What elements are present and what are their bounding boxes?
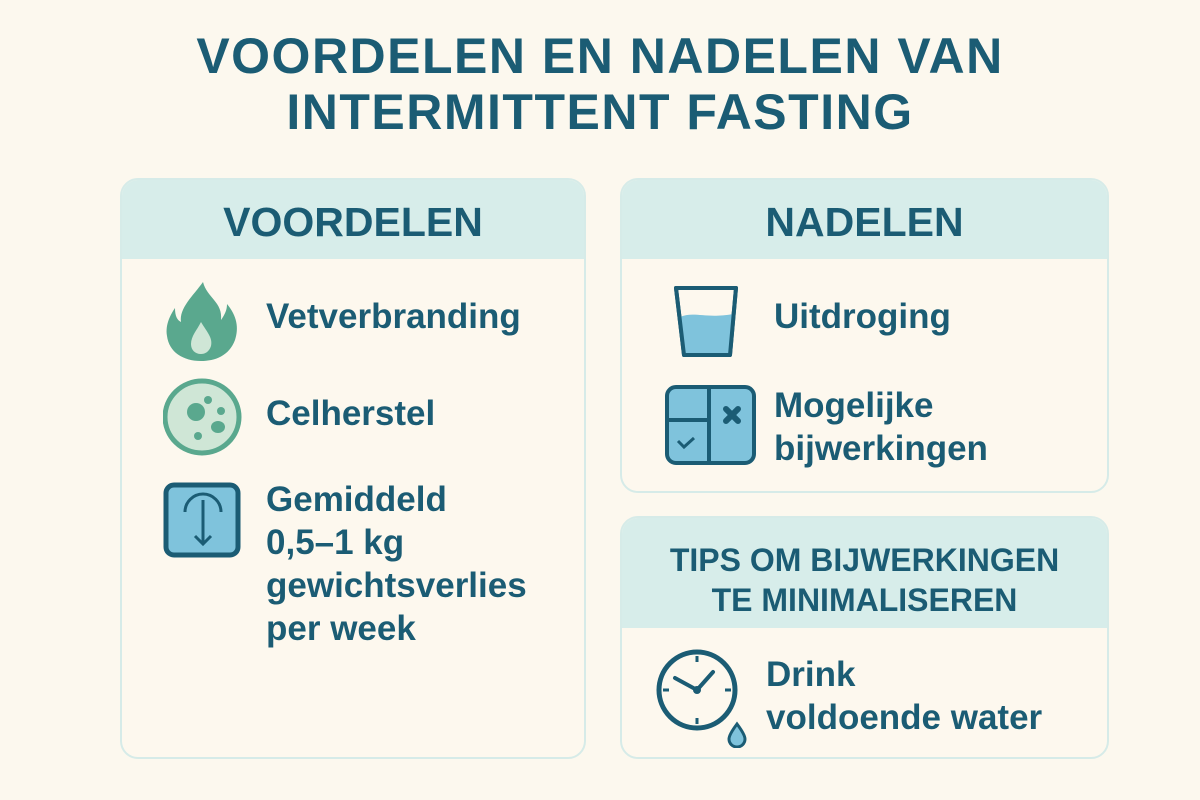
text: drink water — [766, 655, 1042, 737]
text: gewichtsverlies — [266, 480, 527, 648]
icon: glass — [674, 286, 738, 357]
title: INTERMITTENT FASTING — [286, 84, 914, 140]
heading: nadelen — [622, 180, 1107, 259]
text: drink water: voldoende water — [766, 698, 1042, 737]
text: bijwerkingen: bijwerkingen — [774, 429, 988, 468]
heading: voordelen: VOORDELEN — [223, 199, 483, 245]
text: celherstel: Celherstel — [266, 394, 435, 433]
text: gewichtsverlies: 0,5–1 kg — [266, 523, 404, 562]
text: bijwerkingen: Mogelijke — [774, 386, 933, 425]
icon: flame — [166, 282, 237, 361]
text: gewichtsverlies: Gemiddeld — [266, 480, 447, 519]
text: gewichtsverlies: per week — [266, 609, 416, 648]
panel: voordelen — [120, 178, 586, 759]
panel: nadelen — [620, 178, 1109, 493]
heading: voordelen — [122, 180, 584, 259]
title: VOORDELEN EN NADELEN VAN — [196, 28, 1004, 84]
icon: clock with drop — [656, 650, 746, 748]
heading: tips — [622, 518, 1107, 628]
heading: tips: TE MINIMALISEREN — [712, 582, 1017, 618]
icon: grid — [665, 385, 756, 465]
text: bijwerkingen — [774, 386, 988, 468]
text: vetverbranding: Vetverbranding — [266, 297, 521, 336]
title — [196, 28, 1004, 140]
text: gewichtsverlies: gewichtsverlies — [266, 566, 527, 605]
text: drink water: Drink — [766, 655, 855, 694]
heading: nadelen: NADELEN — [765, 199, 964, 245]
panel: tips — [620, 516, 1109, 759]
icon: cell — [163, 378, 242, 456]
icon: scale — [164, 482, 240, 558]
text: uitdroging: Uitdroging — [774, 297, 951, 336]
heading: tips: TIPS OM BIJWERKINGEN — [670, 542, 1059, 578]
